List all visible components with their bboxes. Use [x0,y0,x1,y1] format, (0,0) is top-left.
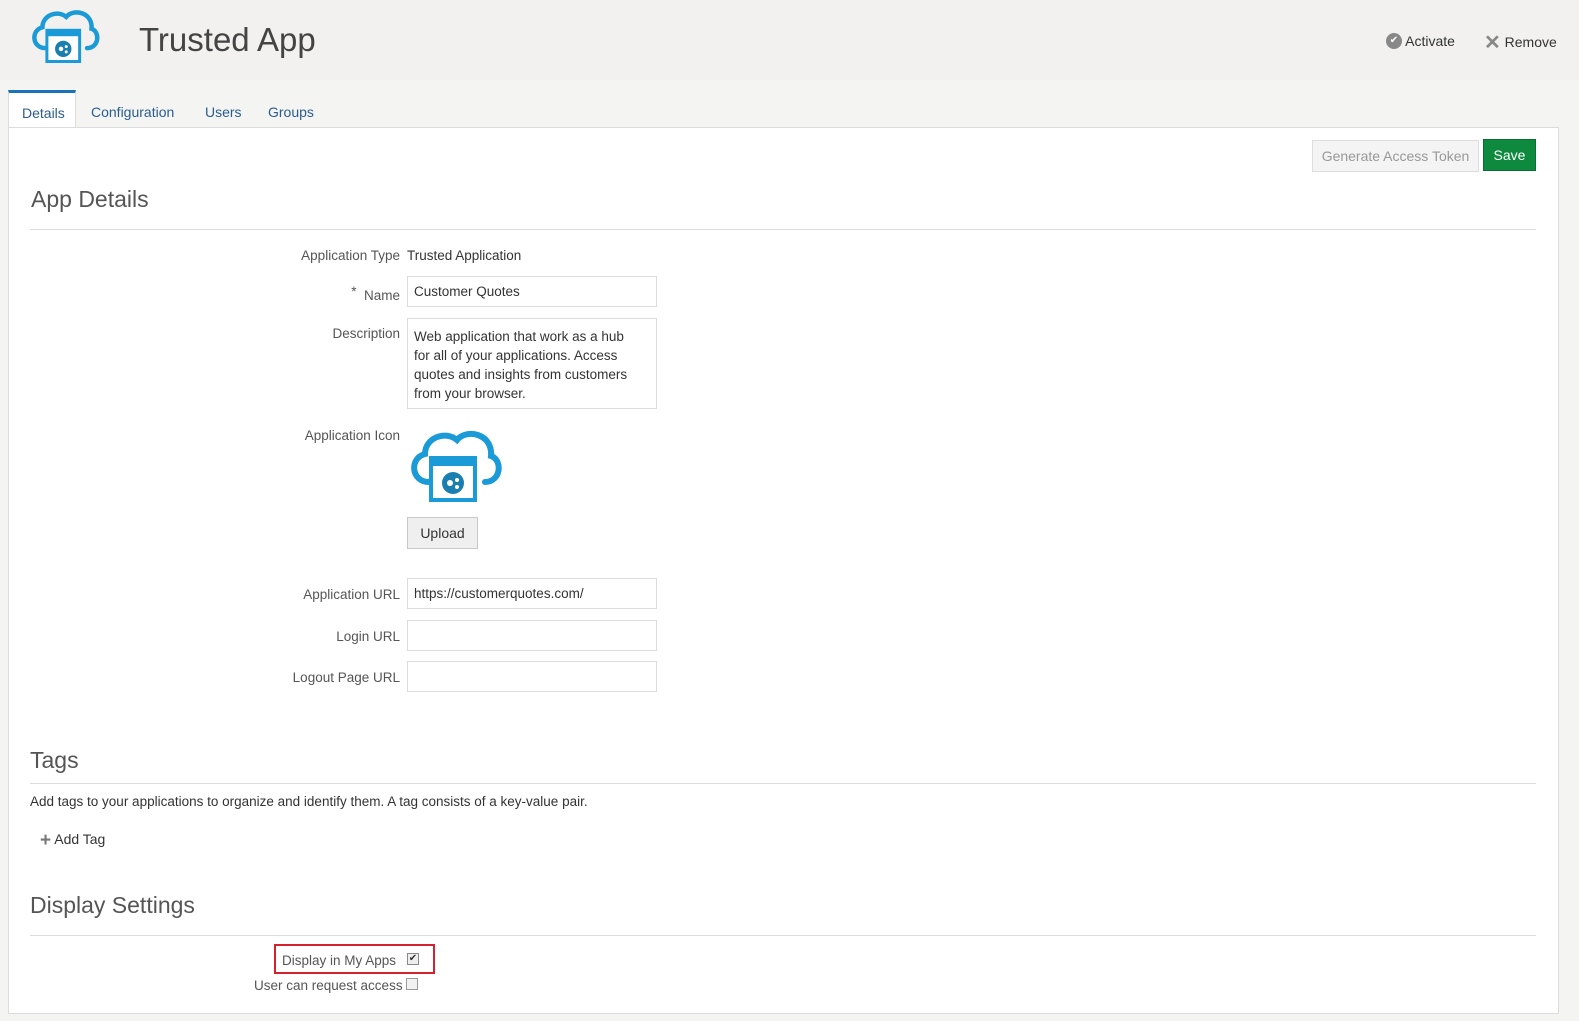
heading: app details: App Details [31,186,149,212]
form: app details: Upload [420,525,465,541]
button: add tag: + Add Tag [40,830,105,851]
icon: app cloud logo [32,10,100,63]
form: app details: from your browser. [414,386,526,401]
heading: display settings: Display Settings [30,892,195,918]
button: generate access token [1312,140,1479,172]
callout: display in my apps: ✔ [409,953,417,964]
form: app details: Login URL [336,629,400,644]
setting: user can request access: User can request access [254,978,403,993]
form: app details: Trusted Application [407,248,521,263]
button: generate access token: Generate Access Token [1322,148,1469,164]
form: app details: Logout Page URL [293,670,400,685]
tabs [8,90,314,127]
form: app details: Web application that work as a hub [414,329,624,344]
tabs: Configuration [91,104,174,120]
tabs: Details [22,105,65,121]
header bar [0,0,1579,80]
tabs: Users [205,104,242,120]
form: app details: quotes and insights from customers [414,367,627,382]
tabs: Groups [268,104,314,120]
form: app details: * Name [351,284,400,303]
form: app details: Application URL [303,587,400,602]
button: save: Save [1494,147,1525,163]
action: activate: Activate [1405,33,1455,49]
form: app details: Customer Quotes [414,284,520,299]
form: app details [293,248,657,692]
form: app details: Application Type [301,248,400,263]
form: app details: for all of your applications. Access [414,348,617,363]
callout: display in my apps [274,944,435,974]
button: save [1483,139,1536,171]
form: app details: https://customerquotes.com/ [414,586,584,601]
action: remove: ✕ Remove [1484,32,1557,54]
heading: tags: Tags [30,747,79,773]
form: app details: Application Icon [305,428,400,443]
title: Trusted App [139,21,316,58]
callout: display in my apps: Display in My Apps [282,953,396,968]
action: activate: ✔ [1390,35,1398,46]
text: tags description: Add tags to your applications to organize and identify them. A tag consists of a key-value pair. [30,794,588,809]
form: app details: Description [332,326,400,341]
